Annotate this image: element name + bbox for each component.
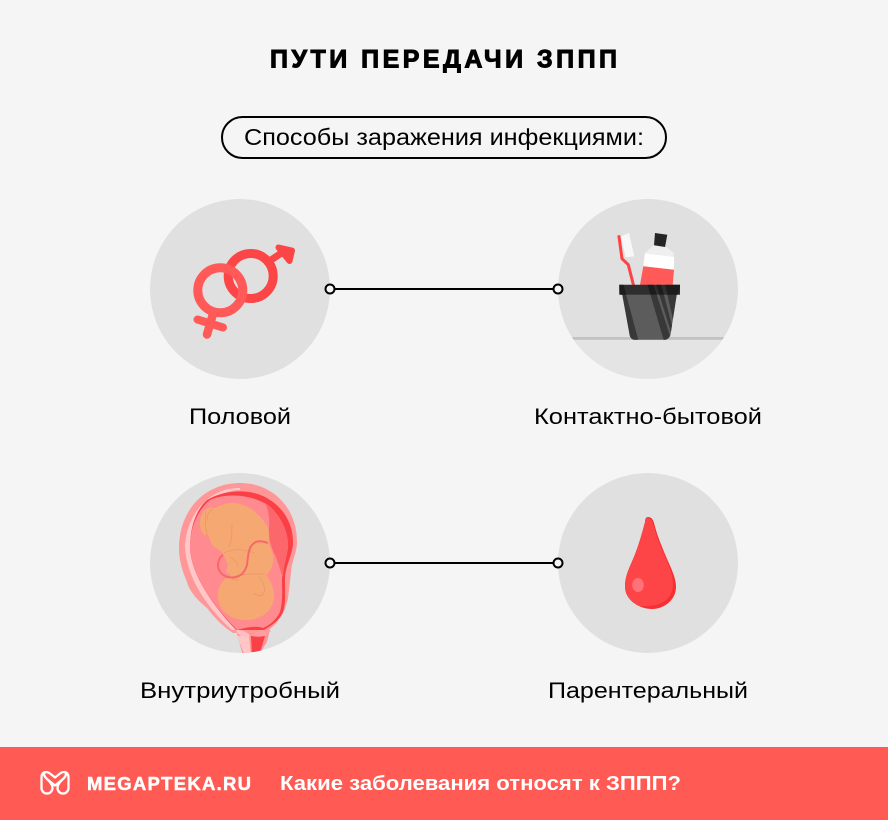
footer bar <box>0 747 888 820</box>
panel: parenteral route <box>558 473 738 653</box>
label: intrauterine: Внутриутробный <box>140 678 340 703</box>
label: parenteral: Парентеральный <box>548 678 748 703</box>
label: household: Контактно-бытовой <box>534 404 762 429</box>
footer question: Какие заболевания относят к ЗППП? <box>280 773 681 795</box>
umbilical cord <box>218 541 268 578</box>
icon: blood drop <box>625 517 676 609</box>
subtitle pill: Способы заражения инфекциями: <box>244 124 644 150</box>
table surface <box>572 337 724 340</box>
brand name: MEGAPTEKA.RU <box>87 773 251 794</box>
panel: intrauterine route <box>150 473 330 656</box>
title: ПУТИ ПЕРЕДАЧИ ЗППП <box>270 46 617 74</box>
subtitle pill <box>222 117 666 158</box>
panel: sexual route <box>150 199 330 379</box>
icon: toothpaste tube <box>640 233 674 285</box>
icon: gender symbols <box>198 248 292 334</box>
connector: bottom row <box>326 558 562 568</box>
panel: household route <box>558 199 738 380</box>
icon: logo <box>42 772 68 794</box>
fetus body <box>200 503 274 620</box>
icon: cup <box>618 284 682 341</box>
icon: uterus with fetus <box>179 483 297 656</box>
icon: toothbrush <box>619 233 634 285</box>
label: sexual: Половой <box>189 404 291 429</box>
connector: top row <box>326 284 562 294</box>
